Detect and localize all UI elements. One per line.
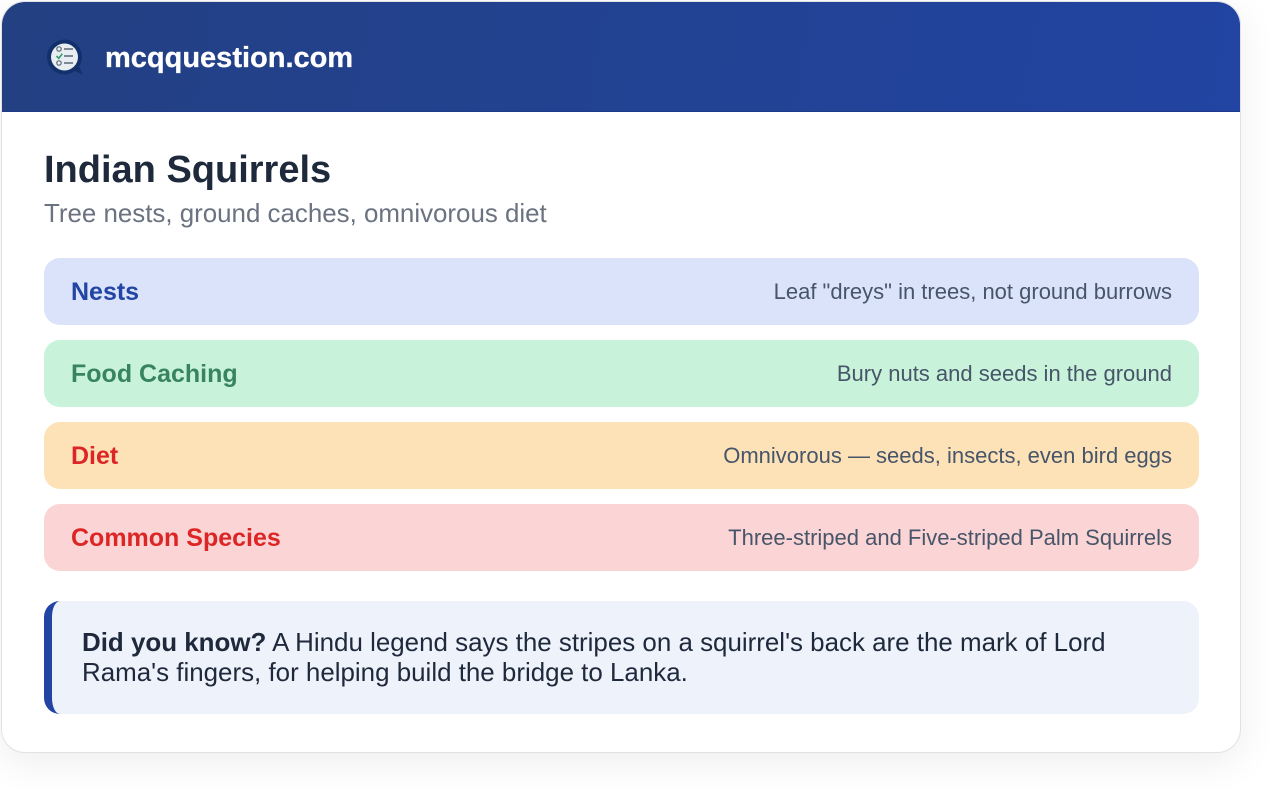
row: nests: Nests <box>71 278 139 306</box>
row: food caching <box>44 340 1198 407</box>
row: common species: Three-striped and Five-striped Palm Squirrels <box>728 525 1172 550</box>
brand name: mcqquestion.com <box>105 42 353 74</box>
row: nests: Leaf "dreys" in trees, not ground burrows <box>774 279 1172 304</box>
row: diet <box>44 422 1198 489</box>
row: common species: Common Species <box>71 524 281 552</box>
title: Indian Squirrels <box>44 149 331 191</box>
row: nests <box>44 258 1198 325</box>
row: diet: Omnivorous — seeds, insects, even bird eggs <box>723 443 1172 468</box>
header band <box>2 2 1240 112</box>
subtitle: Tree nests, ground caches, omnivorous diet <box>44 200 547 228</box>
row: food caching: Food Caching <box>71 360 238 388</box>
row: common species <box>44 504 1198 571</box>
icon: mcq logo <box>47 40 83 75</box>
callout: did you know: Did you know? A Hindu legend says the stripes on a squirrel's back are the mark of Lord <box>82 629 1106 657</box>
row: food caching: Bury nuts and seeds in the ground <box>837 361 1172 386</box>
callout: did you know <box>44 601 1198 714</box>
callout: did you know: Rama's fingers, for helping build the bridge to Lanka. <box>82 659 688 687</box>
row: diet: Diet <box>71 442 118 470</box>
